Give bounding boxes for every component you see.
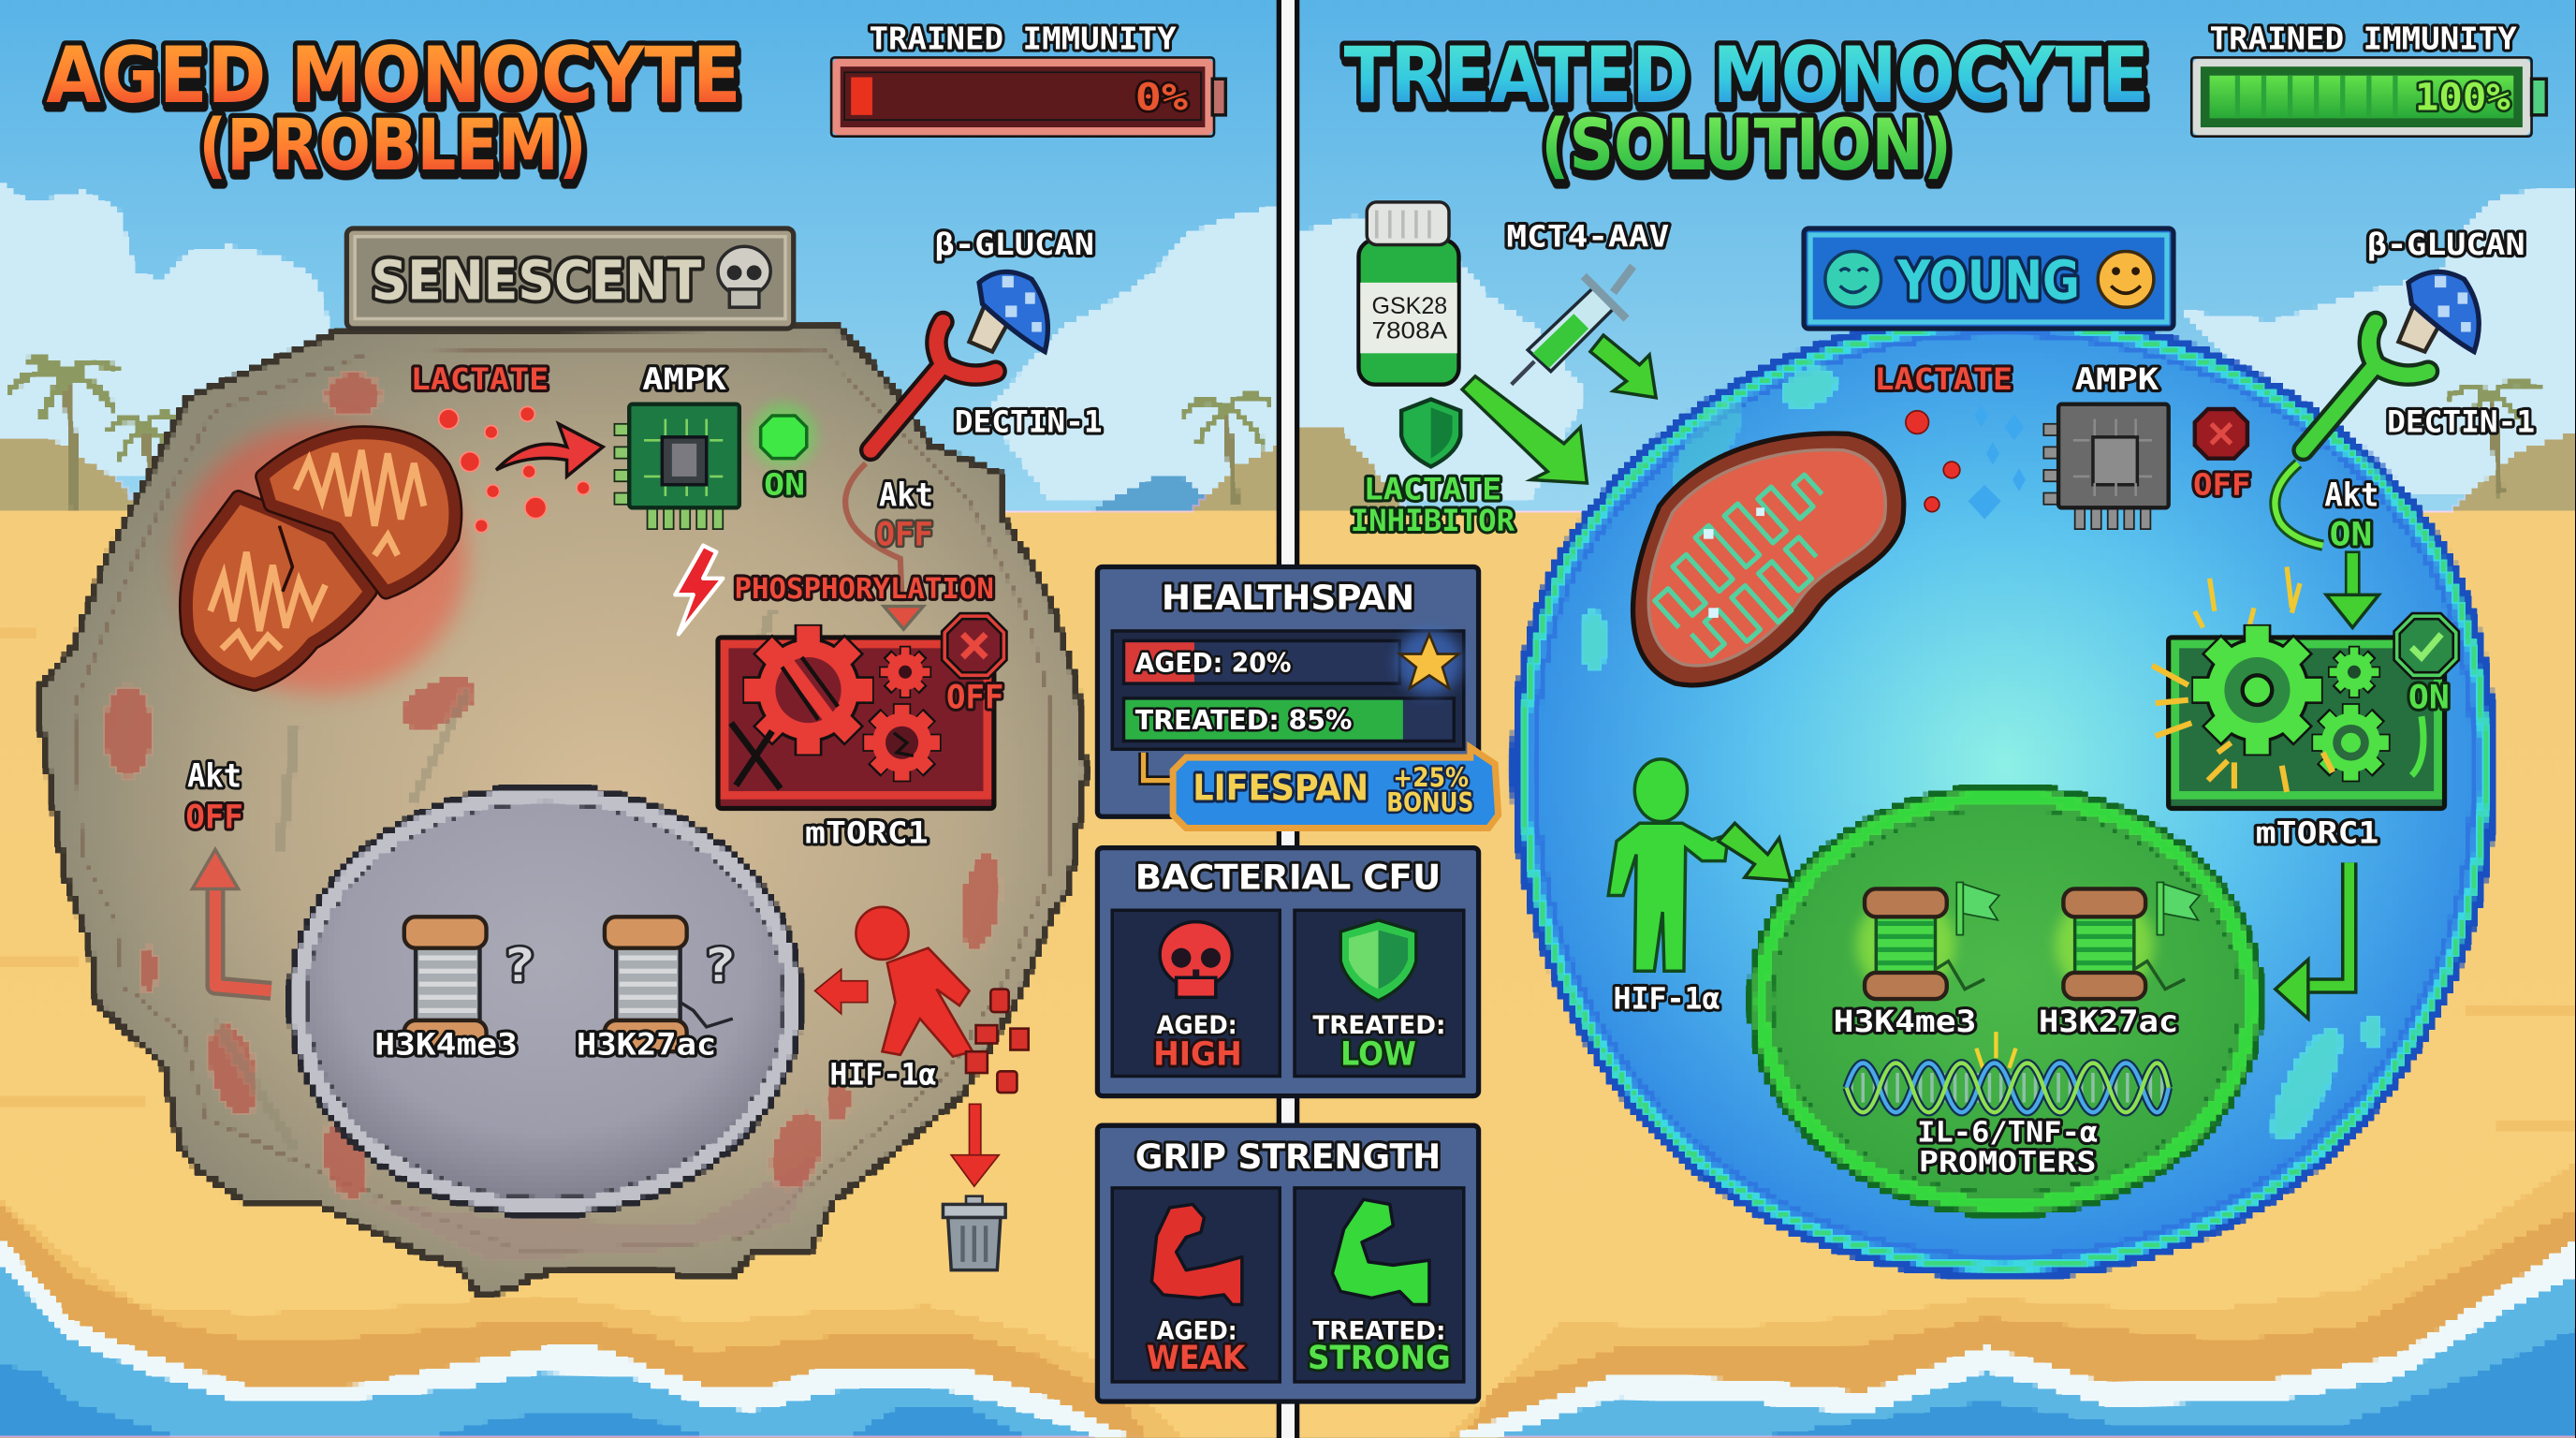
badge: lifespan bonus: +25% [1393, 763, 1469, 794]
icon: lightning [675, 546, 723, 634]
text: histone marks treated: H3K4me3 [1834, 1005, 1976, 1039]
text: promoters: PROMOTERS [1919, 1146, 2096, 1179]
battery: trained immunity 100%: 100% [2415, 76, 2510, 120]
panel: grip strength: GRIP STRENGTH [1135, 1137, 1441, 1177]
text: Akt off (aged top): Akt [879, 477, 933, 515]
arrow: syringe to cell [1590, 335, 1656, 398]
arrow: HIF-1a to nucleus (treated) [1719, 823, 1791, 881]
icon: red skull [1160, 922, 1232, 997]
icon: AMPK chip off [2043, 404, 2169, 529]
icon: weak arm [1151, 1204, 1242, 1304]
battery: trained immunity 0%: 0% [1135, 76, 1189, 120]
bar: treated 85%: TREATED: 85% [1135, 705, 1352, 736]
text: Akt off (aged lower): Akt [187, 757, 242, 796]
text: lactate (treated): LACTATE [1875, 363, 2012, 397]
title: treated monocyte: TREATED MONOCYTE [1344, 31, 2149, 121]
panel: grip strength: STRONG [1308, 1339, 1451, 1377]
flag [2157, 882, 2200, 935]
panel: bacterial CFU [1097, 848, 1479, 1096]
icon: inhibitor shield [1401, 399, 1460, 466]
arrow: lactate to AMPK [496, 424, 603, 477]
badge: lifespan bonus: LIFESPAN [1193, 768, 1368, 810]
signal line: dim [845, 463, 923, 629]
title: aged monocyte: AGED MONOCYTE [46, 31, 741, 121]
bar: aged 20% [1123, 640, 1399, 683]
text: phosphorylation: PHOSPHORYLATION [735, 573, 994, 606]
sparks [2152, 666, 2333, 792]
text: dectin-1 (aged): DECTIN-1 [955, 406, 1103, 440]
text: AMPK (aged): AMPK [642, 363, 726, 397]
text: dectin-1 (treated): DECTIN-1 [2387, 406, 2535, 440]
gear large broken [742, 624, 874, 756]
panel: grip strength: TREATED: [1312, 1317, 1445, 1345]
arrow: mTORC1 to nucleus [2276, 862, 2349, 1019]
text: ON status: ON [764, 468, 805, 502]
text: MCT4-AAV: MCT4-AAV [1506, 220, 1669, 254]
panel: healthspan [1097, 566, 1479, 816]
text: Akt off (aged top): OFF [875, 516, 933, 554]
signal line: active [2275, 463, 2323, 546]
text: OFF status: OFF [2193, 468, 2250, 502]
icon: mitochondrion healthy [1633, 433, 1904, 685]
panel: bacterial CFU: TREATED: [1312, 1012, 1445, 1040]
icon: AMPK chip on [614, 404, 739, 529]
panel: grip strength [1097, 1125, 1479, 1401]
icon: spool H3K4me3 (aged) [404, 917, 535, 1051]
text: histone marks aged [374, 1029, 716, 1063]
text: histone marks aged: H3K27ac [577, 1029, 716, 1063]
battery: trained immunity 100% [2191, 21, 2546, 137]
text: histone marks treated: H3K27ac [2039, 1005, 2178, 1039]
panel: healthspan: HEALTHSPAN [1162, 578, 1414, 618]
cytoplasm blobs [1580, 361, 2382, 1149]
icon: yellow smiley [2098, 252, 2154, 307]
text: Akt off (aged lower): OFF [185, 799, 243, 837]
panel: mTORC1 on [2152, 566, 2456, 808]
badge: lifespan bonus: BONUS [1386, 787, 1473, 818]
arrow: to trash [951, 1104, 999, 1186]
bar: treated 85% [1123, 698, 1454, 741]
icon: spool H3K27ac (treated) [2056, 882, 2200, 999]
octagon check [2397, 616, 2456, 675]
icon: star [1397, 629, 1462, 695]
text: lactate inhibitor: LACTATE [1364, 474, 1501, 507]
panel: mTORC1 on: ON [2408, 678, 2450, 716]
icon: drug bottle GSK287808A: GSK28 [1372, 294, 1447, 319]
icon: spool H3K4me3 (treated) [1856, 882, 1999, 999]
icon: reduced lactate particles [1906, 404, 2026, 520]
icon: green shield [1340, 920, 1416, 1001]
icon: HIF-1a figure healthy [1608, 759, 1728, 971]
title: treated monocyte [1344, 31, 2149, 186]
text: lactate inhibitor [1351, 474, 1515, 538]
cell patches [104, 373, 1007, 1204]
text: HIF-1a (aged): HIF-1α [829, 1058, 936, 1092]
nucleus: aged [291, 787, 800, 1214]
shore bands [0, 1160, 2576, 1438]
icon: spool H3K27ac (aged) [605, 917, 736, 1051]
arrow: Akt to mTORC1 [2326, 552, 2378, 627]
text: mTORC1 (aged): mTORC1 [805, 816, 929, 850]
panel: treated monocyte cell [1516, 315, 2493, 1275]
icon: mushroom (aged) [970, 271, 1047, 352]
text: AMPK (treated): AMPK [2075, 363, 2159, 397]
icon: drug bottle GSK287808A: 7808A [1372, 319, 1448, 345]
icon: mitochondrion damaged [178, 424, 466, 694]
text: beta glucan (aged): β-GLUCAN [935, 228, 1094, 262]
icon: sparks above DNA [1976, 1032, 2015, 1068]
gear small [2328, 646, 2380, 698]
title: aged monocyte: (PROBLEM) [198, 104, 587, 186]
sand [0, 511, 2576, 1438]
icon: skull [718, 246, 770, 307]
title: aged monocyte [46, 31, 741, 186]
bar: aged 20%: AGED: 20% [1135, 648, 1292, 679]
icon: DNA helix [1847, 1064, 2169, 1112]
nucleus: treated [1751, 787, 2261, 1214]
arrow: akt up [192, 849, 271, 990]
icon: HIF-1a figure falling apart [856, 907, 1029, 1093]
battery: trained immunity 0%: TRAINED IMMUNITY [869, 21, 1177, 57]
icon: lactate particles [439, 406, 590, 533]
hills [0, 424, 2576, 518]
icon: teal smiley [1825, 252, 1881, 307]
panel: bacterial CFU: HIGH [1153, 1034, 1242, 1073]
icon: red off octagon [2195, 409, 2247, 459]
icon: syringe [1512, 266, 1633, 385]
battery: trained immunity 100%: TRAINED IMMUNITY [2210, 21, 2517, 57]
panel: grip strength: AGED: [1157, 1317, 1237, 1345]
badge: senescent [346, 228, 794, 329]
icon: dectin-1 receptor (treated) [2304, 322, 2428, 450]
divider [1277, 0, 1299, 1438]
text: HIF-1a (treated): HIF-1α [1613, 983, 1720, 1017]
panel: bacterial CFU: AGED: [1157, 1012, 1237, 1040]
text: lactate (aged): LACTATE [411, 363, 549, 397]
icon: spool H3K4me3 (aged): ? [503, 938, 535, 992]
title: treated monocyte: (SOLUTION) [1541, 104, 1952, 186]
fragment lower [187, 498, 370, 683]
gear large [2191, 624, 2323, 756]
icon: drug bottle GSK287808A [1358, 202, 1459, 385]
panel: bacterial CFU: LOW [1340, 1034, 1416, 1073]
icon: trash can [943, 1196, 1005, 1270]
icon: spool H3K27ac (aged): ? [703, 938, 736, 992]
text: Akt on: Akt [2324, 477, 2378, 515]
badge: senescent: SENESCENT [372, 248, 702, 312]
icon: strong arm [1332, 1199, 1429, 1304]
text: Akt on: ON [2330, 516, 2372, 554]
gear small [879, 646, 931, 698]
octagon x [944, 616, 1003, 675]
battery: trained immunity 0% [831, 21, 1225, 137]
arrow: bottle to cell [1462, 376, 1587, 483]
palm trees [10, 360, 2539, 509]
icon: green LED on [751, 403, 816, 468]
sea [0, 1239, 2576, 1438]
text: histone marks aged: H3K4me3 [374, 1029, 518, 1063]
text: lactate inhibitor: INHIBITOR [1351, 505, 1515, 538]
panel: mTORC1 off: OFF [946, 678, 1003, 716]
flag [1956, 882, 1999, 935]
panel: bacterial CFU: BACTERIAL CFU [1135, 857, 1441, 897]
gear medium [862, 703, 942, 782]
text: mTORC1 (treated): mTORC1 [2256, 816, 2378, 850]
icon: dectin-1 receptor (aged) [871, 322, 996, 450]
text: Akt off (aged lower) [185, 757, 243, 837]
arrow: to nucleus (aged) [815, 969, 868, 1014]
debris [966, 990, 1029, 1093]
icon: mushroom (treated) [2398, 271, 2479, 352]
badge: young: YOUNG [1896, 248, 2080, 312]
badge: young [1804, 228, 2174, 329]
panel: mTORC1 off [718, 616, 1003, 808]
text: histone marks treated [1834, 1005, 2178, 1039]
text: Akt off (aged top) [875, 477, 933, 554]
badge: lifespan bonus [1144, 748, 1499, 829]
text: Akt on [2324, 477, 2378, 554]
fragment upper [263, 433, 455, 592]
text: beta glucan (treated): β-GLUCAN [2367, 228, 2525, 262]
text: promoters [1917, 1117, 2098, 1179]
panel: aged monocyte cell [41, 329, 1084, 1293]
panel: grip strength: WEAK [1147, 1339, 1247, 1377]
text: promoters: IL-6/TNF-α [1917, 1117, 2098, 1150]
clouds [0, 184, 2576, 501]
gear medium [2311, 703, 2391, 782]
